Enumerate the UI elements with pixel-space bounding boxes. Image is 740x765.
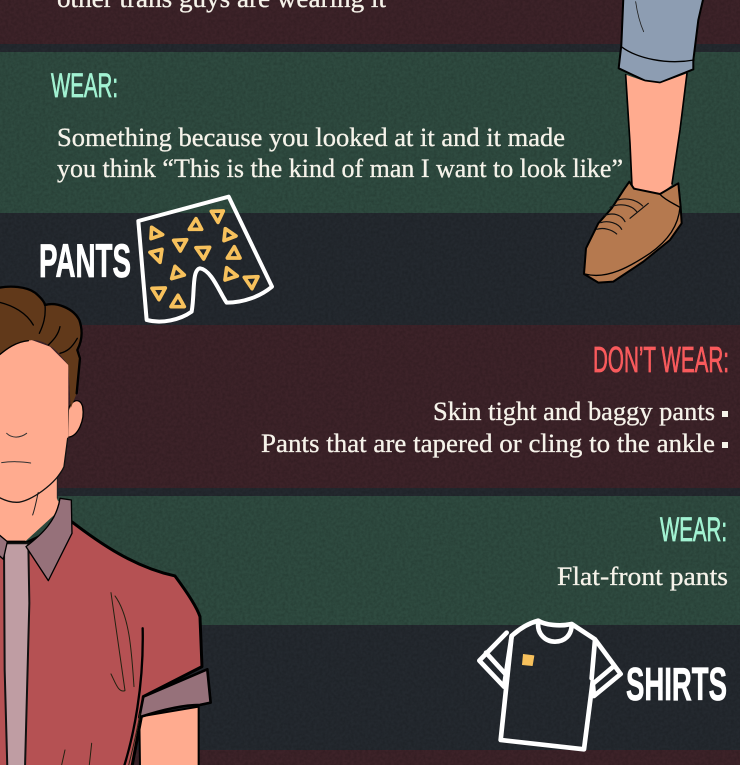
arm	[139, 707, 199, 765]
list: don't wear items: Skin tight and baggy pants	[433, 397, 715, 426]
heading: pants: PANTS	[39, 234, 131, 287]
icon: t-shirt	[479, 621, 621, 749]
shirt body	[0, 522, 202, 765]
leg	[626, 73, 687, 194]
triangle pattern	[150, 211, 258, 307]
shirt folds	[62, 593, 140, 765]
face	[0, 340, 68, 502]
text: wear description	[57, 123, 623, 183]
heading: wear: WEAR:	[51, 67, 118, 105]
illustration: man upper body	[0, 287, 211, 765]
ear	[68, 401, 83, 437]
list: don't wear items: Pants that are tapered or cling to the ankle	[261, 429, 715, 458]
list: don't wear items	[261, 397, 728, 458]
neck	[0, 477, 63, 542]
collar	[26, 498, 72, 581]
text: flat-front pants: Flat-front pants	[557, 562, 728, 591]
shoe	[584, 182, 682, 283]
text: wear description: Something because you looked at it and it made	[57, 123, 565, 152]
illustration: leg and shoe	[584, 0, 703, 283]
sleeve cuff	[139, 669, 211, 717]
icon: patterned shorts	[138, 197, 272, 322]
text: wear description: you think “This is the kind of man I want to look like”	[57, 154, 623, 183]
rolled trouser leg	[619, 0, 703, 83]
undershirt	[4, 543, 29, 765]
hair	[0, 287, 82, 408]
pocket	[522, 654, 534, 666]
